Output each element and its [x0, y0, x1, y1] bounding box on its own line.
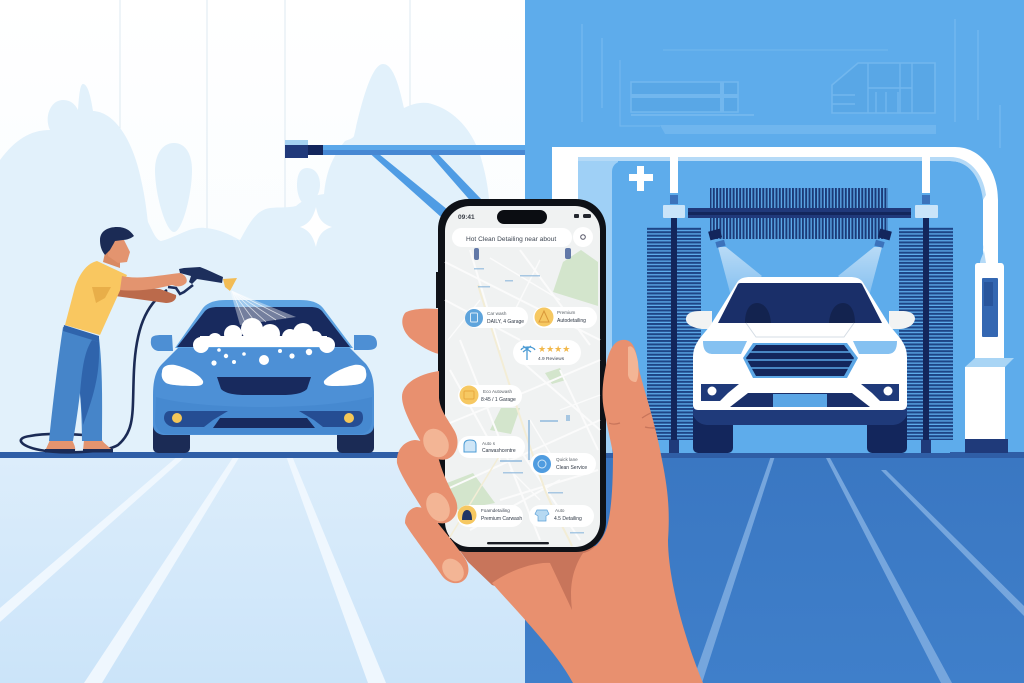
knuckle creases: [609, 413, 655, 428]
top brush: [663, 188, 938, 239]
smartphone: [436, 199, 606, 552]
hair: [100, 227, 134, 255]
nozzle: [223, 278, 237, 291]
feet: [45, 440, 113, 451]
search bar: [452, 227, 593, 247]
body shell: [693, 277, 907, 410]
fog lamps: [172, 413, 182, 423]
result card 2: Premium: [557, 310, 576, 315]
mirrors: [151, 335, 173, 351]
grille: [743, 343, 858, 378]
sparkle on wall: [300, 207, 332, 247]
neck and face: [103, 248, 120, 268]
result card 1: Car wash: [487, 311, 507, 316]
status icons: [574, 214, 591, 218]
trousers: [49, 327, 102, 441]
background foam clouds: [0, 64, 525, 455]
little finger: [405, 507, 468, 583]
search bar: Hot Clean Detailing near about: [466, 236, 556, 243]
underbody: [693, 402, 907, 425]
result card 5: [530, 453, 596, 475]
hood crease: [746, 323, 854, 337]
side brush right: [899, 218, 953, 453]
plus sign: [629, 166, 653, 191]
result card 6: Premium Carwash: [481, 516, 522, 522]
result card 7: Auto: [555, 508, 565, 513]
result card 5: Clean Service: [556, 465, 587, 471]
windshield: [718, 283, 882, 323]
hand palm and index finger behind phone: [402, 309, 640, 612]
spray gun: [179, 267, 223, 284]
lower bumper: [164, 411, 228, 427]
status bar time: 09:41: [458, 214, 475, 221]
headlights: [703, 341, 747, 354]
main road: [478, 285, 572, 546]
headlights: [162, 365, 203, 386]
ground line: [0, 452, 1024, 458]
mirrors: [686, 311, 712, 329]
streets: [445, 250, 600, 540]
posts: [670, 157, 678, 193]
rating card: 4.9 Reviews: [538, 356, 565, 362]
left wall background: [0, 0, 525, 455]
right floor lane lines: [692, 456, 1024, 683]
white suv: [686, 277, 915, 453]
result card 4: [458, 436, 525, 458]
result card 5: Quick lane: [556, 457, 578, 462]
result card 3: [458, 385, 522, 407]
middle finger: [402, 371, 458, 460]
hose: [21, 290, 167, 452]
result card 4: Auto s: [482, 441, 496, 446]
right wall background: [525, 0, 1024, 455]
wheels: [693, 410, 733, 453]
rating card: [513, 340, 581, 365]
result card 2: Autodetailing: [557, 318, 586, 324]
left floor lane lines: [0, 456, 386, 683]
spray nozzles and cones: [708, 229, 892, 300]
blue hatchback car: [151, 290, 377, 453]
result card 2: [533, 307, 597, 328]
result card 1: [465, 307, 528, 328]
wall vertical seams: [120, 0, 410, 290]
foam: [193, 318, 335, 353]
result card 3: 8:45 / 1 Garage: [481, 397, 516, 403]
result card 7: [529, 505, 594, 527]
grille: [217, 377, 311, 395]
right floor: [525, 458, 1024, 683]
rear arm: [115, 286, 176, 303]
result card 3: Eco Autowash: [483, 389, 513, 394]
thumb nail: [628, 346, 638, 382]
result card 4: Carwashcentre: [482, 448, 516, 454]
sketch of car wash on right wall: [582, 19, 1000, 148]
map screen: [445, 206, 600, 547]
windshield: [177, 307, 350, 347]
number plate: [773, 394, 827, 407]
yellow shirt: [65, 261, 127, 335]
body: [153, 348, 374, 435]
left floor: [0, 458, 525, 683]
map pins and labels: [474, 248, 584, 534]
dynamic island: [497, 210, 547, 224]
green parks: [447, 250, 598, 510]
spray fan: [230, 290, 296, 325]
inner panel: [578, 157, 618, 453]
palm and thumb: [492, 340, 703, 683]
side brush left: [647, 218, 701, 453]
front arm: [120, 273, 187, 291]
result card 1: DAILY, 4 Garage: [487, 319, 524, 325]
car wash gantry frame: [552, 147, 998, 453]
fog lamps and bumper vent: [701, 384, 739, 401]
hand fingers and thumb over phone: [397, 340, 703, 683]
home indicator: [487, 542, 549, 544]
white frame: [552, 147, 998, 265]
result card 6: [457, 505, 523, 527]
rating card: ★★★★: [538, 344, 570, 354]
wheels: [153, 410, 190, 453]
result card 6: Foamdetailing: [481, 508, 510, 513]
person washing car: [21, 227, 237, 452]
foam droplets: [211, 348, 312, 366]
payment kiosk: [965, 240, 1014, 453]
ring finger: [397, 440, 457, 523]
roof: [175, 300, 353, 348]
result card 7: 4.5 Detailing: [554, 516, 582, 522]
overhead spray arm on left: [285, 140, 525, 217]
